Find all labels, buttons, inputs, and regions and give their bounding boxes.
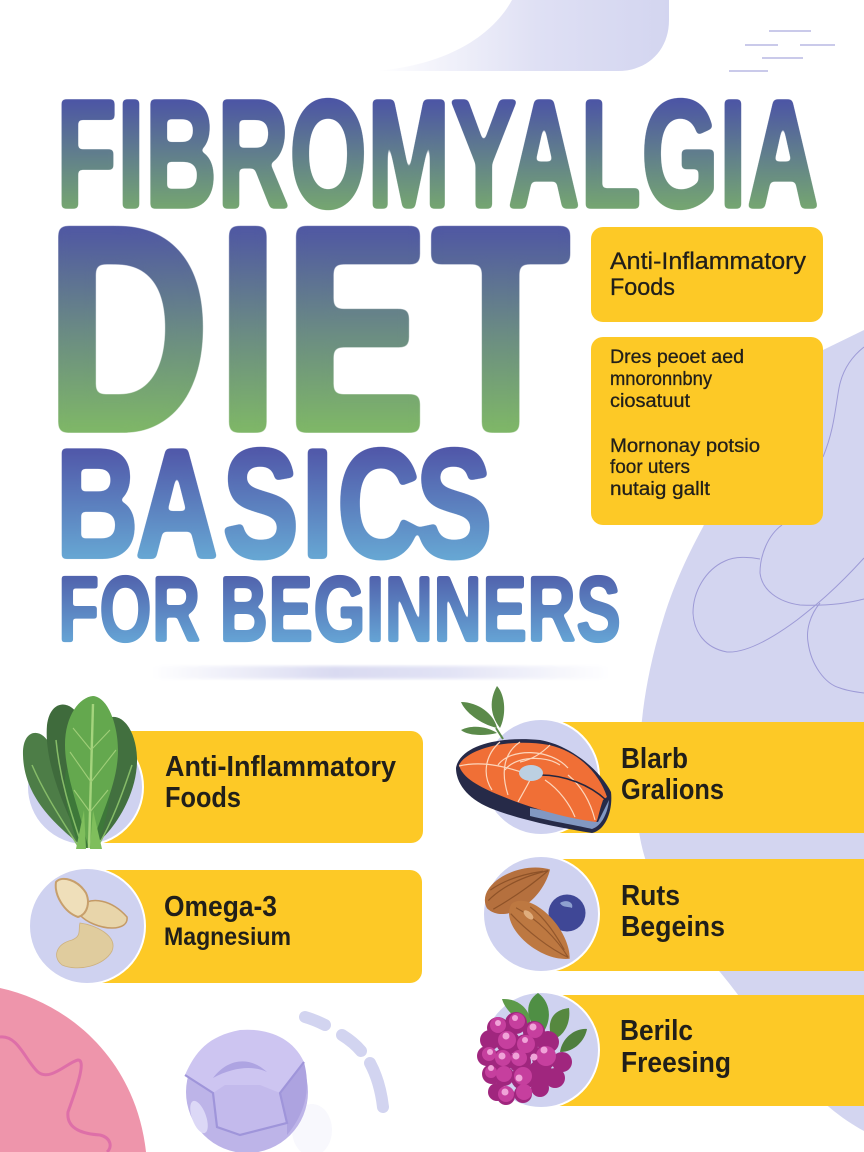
- panel: spinach item: [23, 696, 423, 849]
- card heading: [610, 248, 806, 301]
- heading: [165, 751, 396, 814]
- card paragraph 1: mnoronnbny: [610, 369, 712, 390]
- pink background shape bottom left: [0, 988, 146, 1152]
- lavender background shape right: [637, 330, 864, 1131]
- icon: almonds and blueberry: [477, 854, 599, 972]
- title line: BASICS: BASICS: [56, 417, 492, 590]
- heading: Omega-3: [164, 891, 277, 923]
- heading: [621, 880, 725, 943]
- heading: Begeins: [621, 911, 725, 943]
- heading: Magnesium: [164, 923, 291, 951]
- heading: Ruts: [621, 880, 680, 912]
- banner: [541, 722, 864, 833]
- almond 1: [477, 854, 560, 923]
- panel: berries item: [477, 992, 864, 1108]
- decorative dashes top right: [729, 31, 835, 71]
- pink squiggle line: [0, 1037, 110, 1152]
- card heading: Foods: [610, 274, 675, 301]
- icon: sliced nuts: [29, 868, 145, 984]
- banner: [541, 859, 864, 971]
- heading: Anti-Inflammatory: [165, 751, 396, 783]
- card paragraph 1: [610, 347, 744, 412]
- panel: top right anti-inflammatory card: [591, 227, 823, 322]
- title line: DIET: DIET: [45, 166, 570, 492]
- divider under title: [150, 666, 612, 679]
- icon: berries: [477, 992, 599, 1108]
- panel: almonds item: [477, 854, 864, 972]
- icon: spinach: [23, 696, 143, 849]
- heading: [621, 743, 724, 806]
- card paragraph 1: Dres peoet aed: [610, 347, 744, 368]
- heading: Freesing: [621, 1047, 731, 1079]
- panel: top right text card: [591, 337, 823, 525]
- card paragraph 2: nutaig gallt: [610, 479, 711, 500]
- heading: Berilc: [620, 1015, 693, 1047]
- heading: Gralions: [621, 774, 724, 806]
- dashed arc near gem: [305, 1017, 383, 1107]
- icon: herb sprig: [461, 686, 504, 739]
- top decorative blob: [375, 0, 669, 71]
- heading: Foods: [165, 782, 241, 814]
- card paragraph 2: Mornonay potsio: [610, 436, 760, 457]
- card paragraph 2: [610, 436, 760, 500]
- panel: salmon item: [456, 686, 864, 835]
- card heading: Anti-Inflammatory: [610, 248, 806, 275]
- heading: Blarb: [621, 743, 688, 775]
- banner: [87, 870, 422, 983]
- thin line squiggle on lavender shape: [693, 347, 864, 693]
- panel: nuts item: [29, 868, 422, 984]
- card paragraph 2: foor uters: [610, 457, 690, 478]
- lavender gem blob: [185, 1030, 332, 1152]
- card paragraph 1: ciosatuut: [610, 391, 691, 412]
- banner: [541, 995, 864, 1106]
- banner: [85, 731, 423, 843]
- heading: [164, 891, 291, 951]
- title line: FOR BEGINNERS: FOR BEGINNERS: [58, 557, 621, 661]
- almond 2: [499, 892, 582, 971]
- icon: salmon steak: [456, 719, 611, 835]
- heading: [620, 1015, 731, 1079]
